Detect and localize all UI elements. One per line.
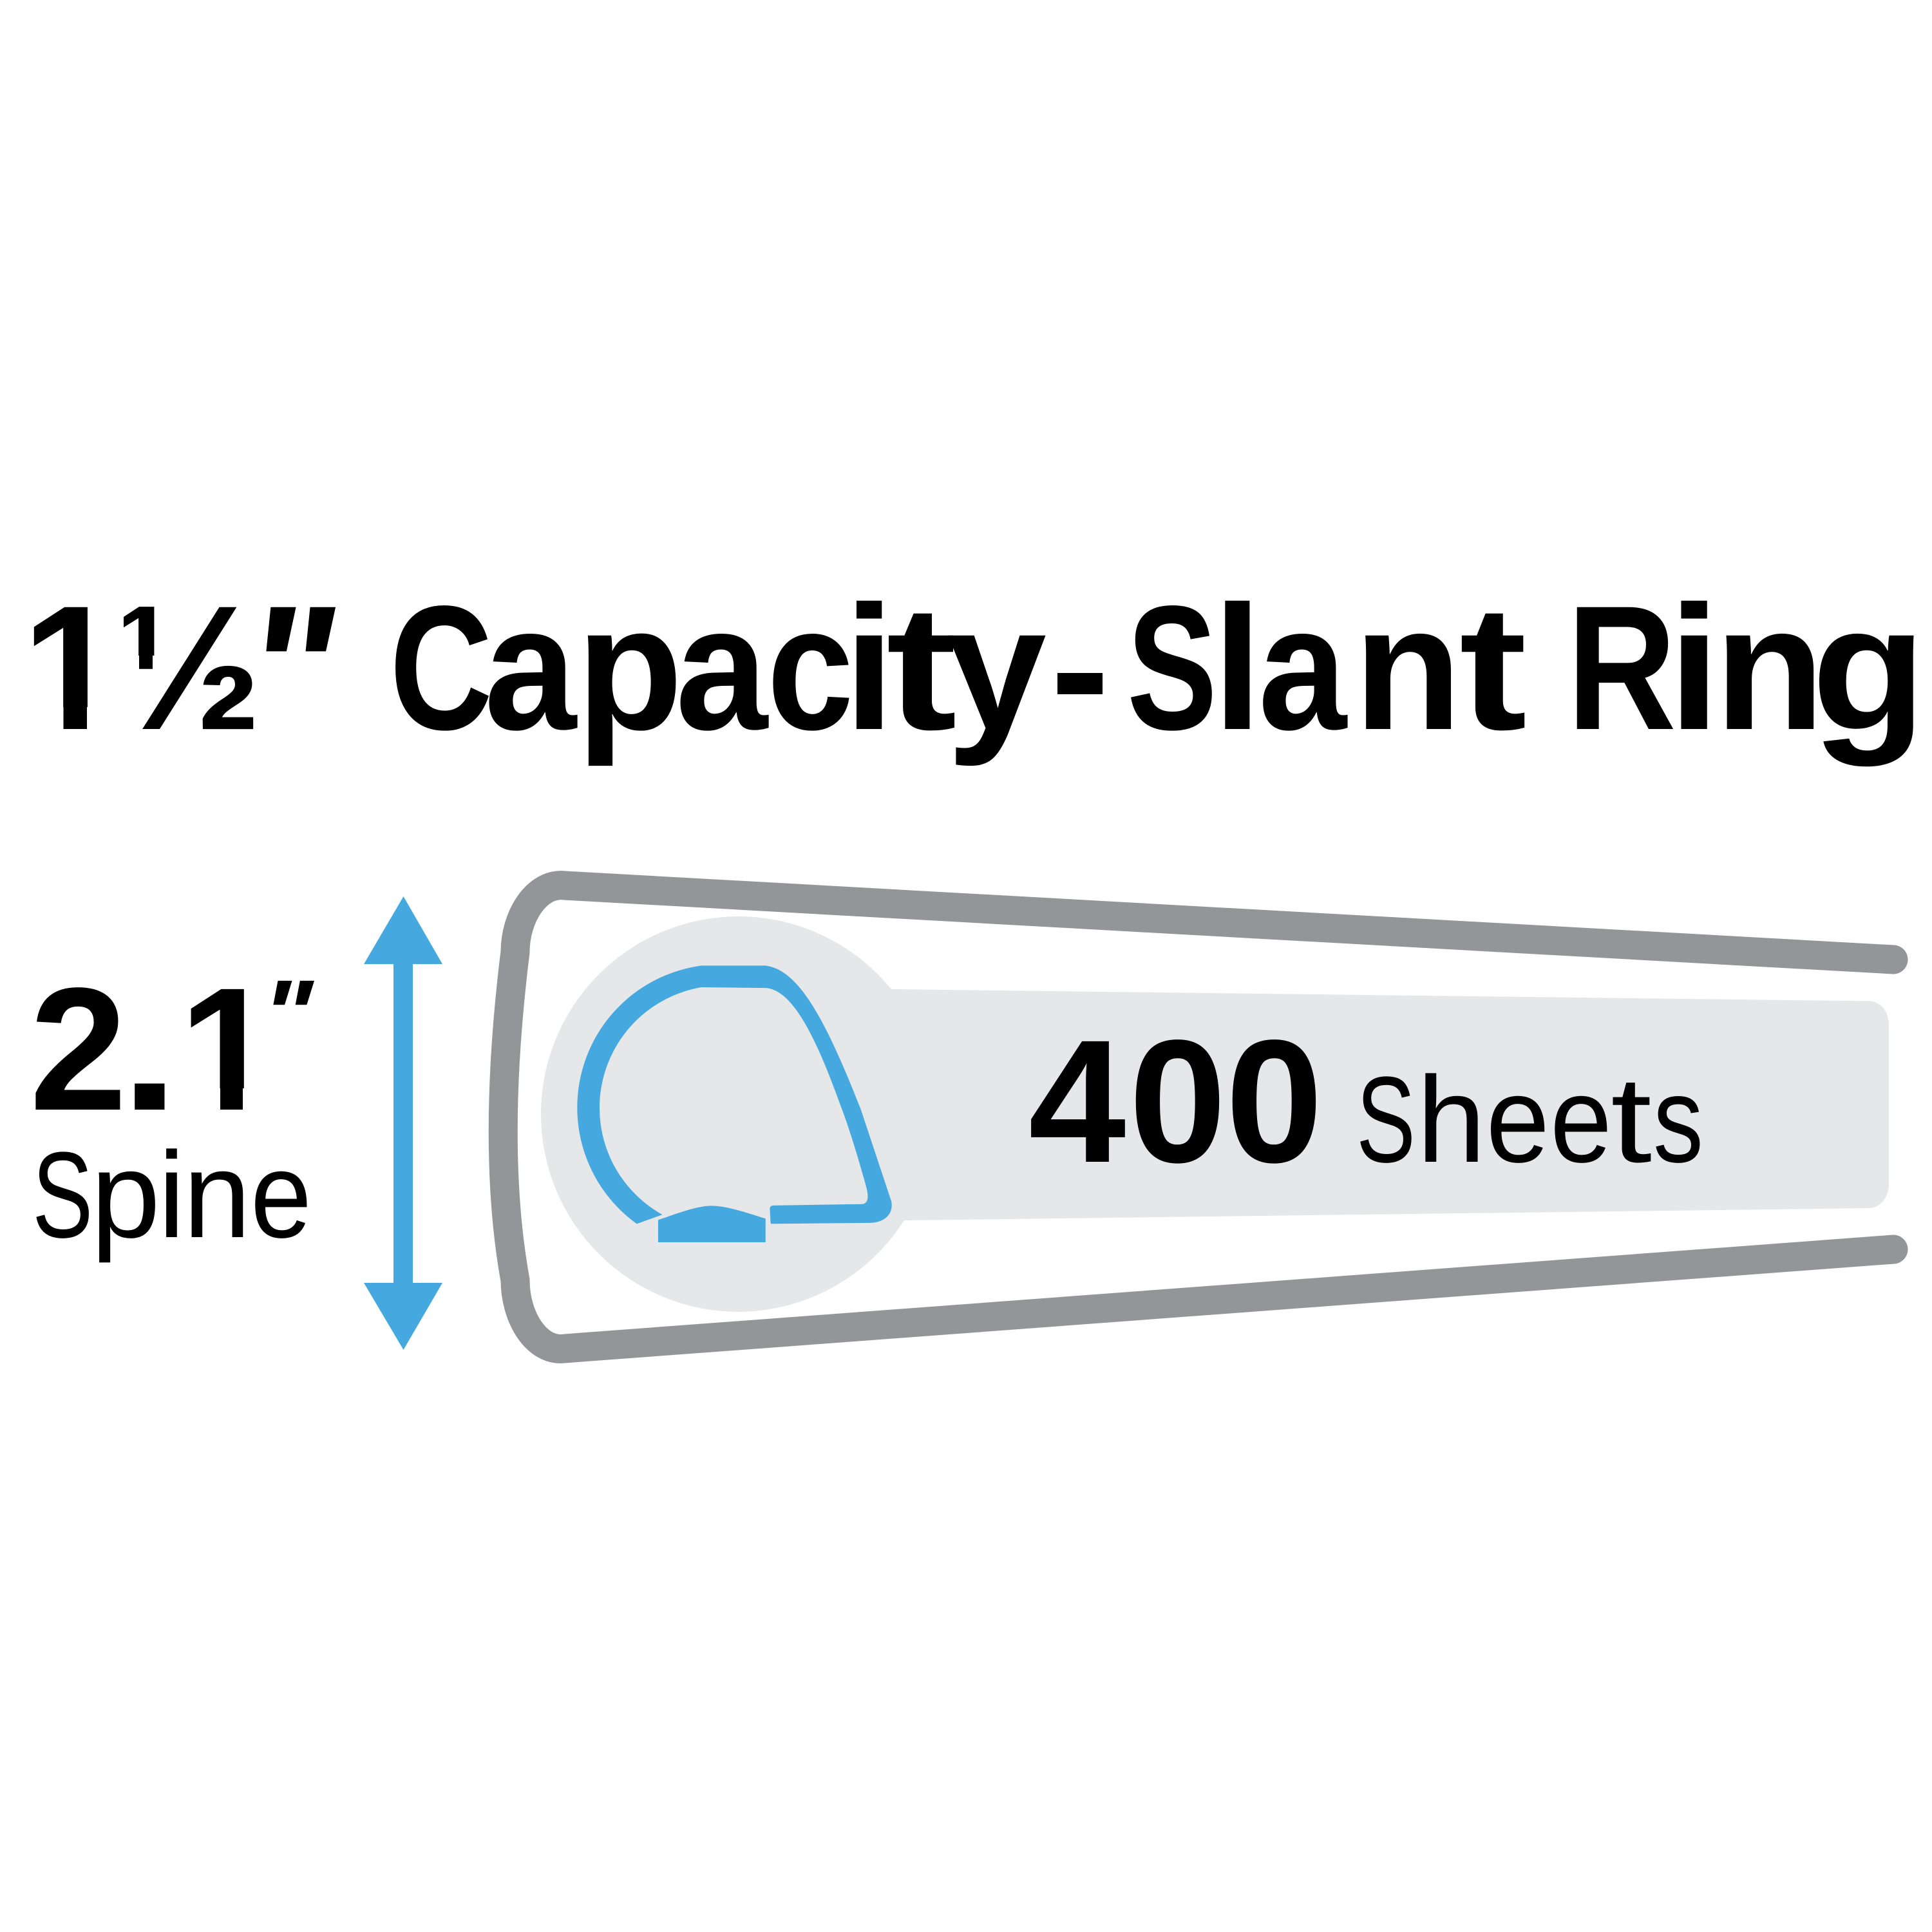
title: Capacity: a (484, 569, 578, 767)
sheets label: e (1550, 1052, 1612, 1188)
title: Slant: n (1354, 569, 1462, 767)
slant ring icon (577, 965, 892, 1242)
spine label: S (32, 1127, 93, 1264)
spine value 2.1 inches: . (120, 951, 179, 1147)
binder diagram (503, 886, 1893, 1349)
sheets label: h (1417, 1052, 1486, 1188)
title: Capacity: c (767, 569, 854, 767)
title (22, 569, 1926, 768)
spine value 2.1 inches: 1 (179, 951, 276, 1147)
title: one and a half inch: " (233, 569, 354, 767)
title: Slant: a (1258, 569, 1348, 767)
title: Ring: g (1812, 569, 1926, 768)
spine label: e (251, 1127, 312, 1264)
sheets label: t (1611, 1052, 1652, 1188)
spine label: i (158, 1127, 185, 1264)
sheet count 400: 400 (1028, 1003, 1323, 1199)
title: Slant: t (1459, 569, 1527, 767)
title: Ring: i (1668, 569, 1721, 767)
title: Capacity: a (676, 569, 769, 767)
spine label: p (91, 1127, 160, 1264)
title: one and a half inch: 1 (22, 569, 120, 767)
sheet capacity panel (541, 916, 1889, 1312)
spine measurement label (30, 951, 327, 1264)
ring (577, 965, 892, 1224)
title: Capacity: t (886, 569, 957, 767)
sheets label: S (1356, 1052, 1416, 1188)
title: Capacity: y (947, 569, 1048, 768)
title: Slant: S (1127, 569, 1217, 767)
title: Capacity: i (844, 569, 895, 767)
title: Capacity: C (390, 569, 493, 767)
binder cover outline (503, 886, 1893, 1349)
spine inch mark: " (249, 960, 327, 1068)
title: hyphen (1057, 673, 1103, 694)
sheets label: e (1486, 1052, 1549, 1188)
title: Ring: n (1714, 569, 1825, 767)
sheets label: s (1653, 1052, 1703, 1188)
title: Slant: l (1213, 569, 1262, 767)
title: one and a half inch (22, 569, 354, 767)
spine label: n (183, 1127, 251, 1264)
spine value 2.1 inches: 2 (30, 951, 127, 1147)
arrow: double-headed spine height (364, 896, 442, 1350)
title: one and a half inch: ½ (115, 569, 261, 767)
title: Capacity: p (576, 569, 683, 768)
title: Ring: R (1567, 569, 1676, 767)
ring base (658, 1206, 766, 1242)
